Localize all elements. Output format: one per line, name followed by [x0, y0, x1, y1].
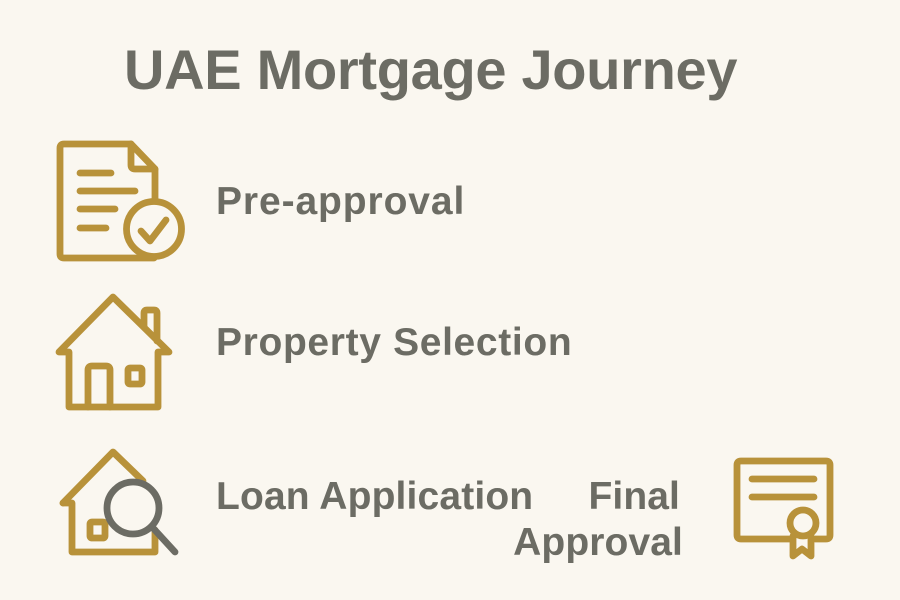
icon: house with magnifier — [63, 452, 175, 552]
step label: loan application: Loan Application — [216, 475, 533, 518]
step label: property selection: Property Selection — [216, 321, 572, 364]
magnifying glass — [107, 482, 175, 552]
step label: final approval: Final — [588, 475, 680, 518]
step label: final approval — [513, 475, 683, 564]
title: UAE Mortgage Journey — [124, 38, 737, 101]
icon: document with check — [60, 144, 182, 258]
icon: certificate with ribbon — [737, 461, 830, 556]
icon: house — [59, 297, 169, 407]
step label: pre-approval: Pre-approval — [216, 180, 465, 223]
step label: final approval: Approval — [513, 521, 683, 564]
